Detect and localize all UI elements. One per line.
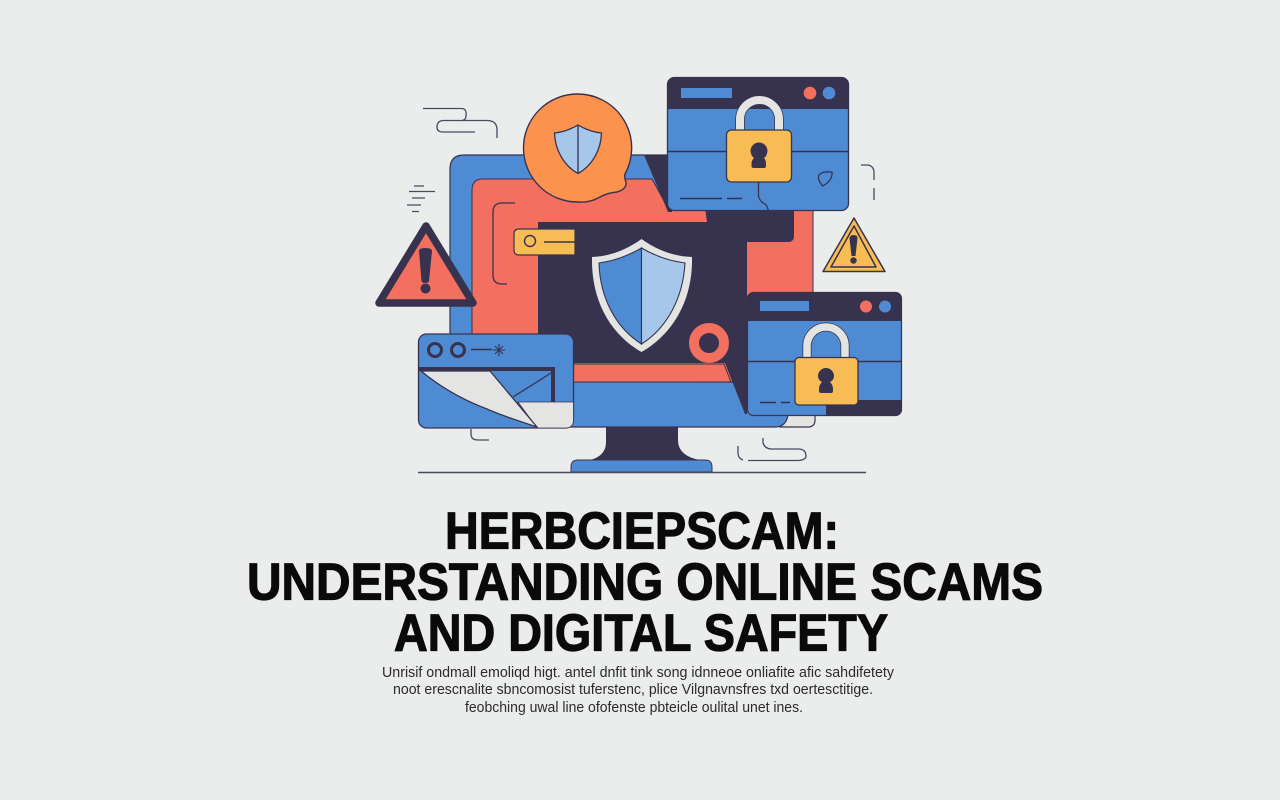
email window bbox=[418, 334, 574, 428]
title: HERBCIEPSCAM: bbox=[445, 502, 839, 560]
subtitle text: Unrisif ondmall emoliqd higt. antel dnfit tink song idnneoe onliafite afic sahdifetety bbox=[382, 665, 895, 681]
warning triangle, right bbox=[823, 218, 885, 272]
illustration: monitor with security icons bbox=[379, 78, 902, 472]
title: UNDERSTANDING ONLINE SCAMS bbox=[247, 554, 1043, 612]
orange badge with shield bbox=[524, 94, 632, 202]
red ring bbox=[694, 328, 724, 358]
monitor stand bbox=[571, 425, 712, 472]
main shield bbox=[592, 239, 692, 352]
browser window with padlock, bottom bbox=[748, 292, 902, 416]
key tag bbox=[514, 229, 575, 255]
monitor body bbox=[450, 155, 815, 427]
subtitle text: noot erescnalite sbncomosist tuferstenc, plice Vilgnavnsfres txd oertesctitige. bbox=[393, 682, 873, 698]
subtitle text bbox=[382, 665, 895, 716]
title: AND DIGITAL SAFETY bbox=[394, 604, 888, 662]
title bbox=[247, 502, 1043, 662]
bracket line on red panel bbox=[493, 203, 515, 284]
ground line bbox=[418, 472, 866, 474]
browser window with padlock, top bbox=[668, 78, 848, 210]
subtitle text: feobching uwal line ofofenste pbteicle oulital unet ines. bbox=[465, 700, 803, 716]
decorative connector lines bbox=[407, 108, 874, 460]
warning triangle, left bbox=[379, 226, 473, 303]
